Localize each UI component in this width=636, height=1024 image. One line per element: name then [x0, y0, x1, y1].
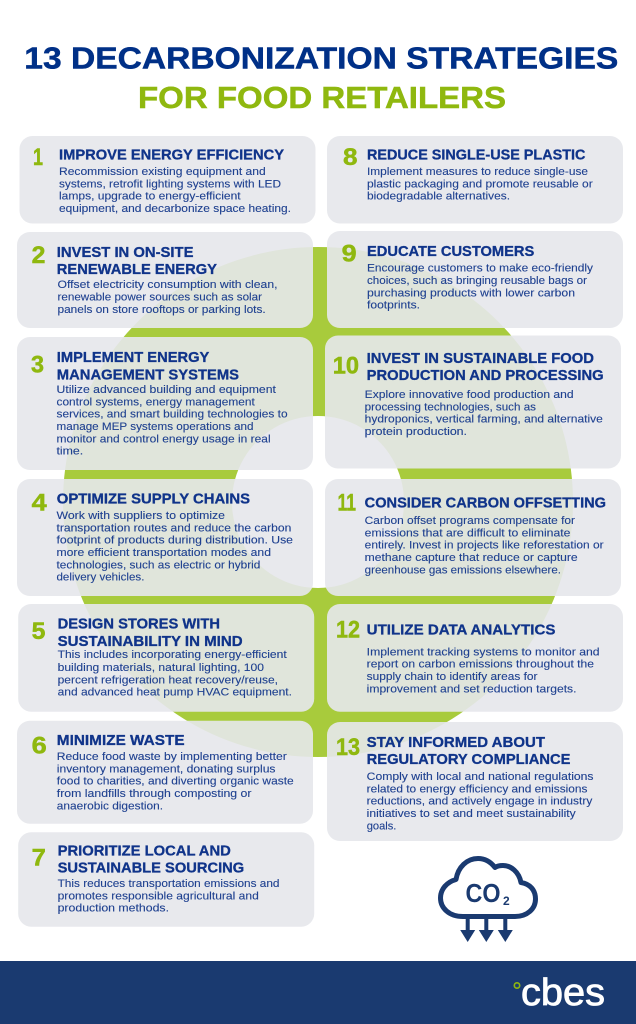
footer bar — [0, 961, 636, 1024]
panel: strategy 9: 9 — [342, 241, 357, 268]
panel: strategy 9: purchasing products with lower carbon — [367, 287, 575, 299]
panel: strategy 6: MINIMIZE WASTE — [57, 733, 185, 749]
panel: strategy 11: 11 — [338, 490, 356, 517]
panel: strategy 11: CONSIDER CARBON OFFSETTING — [365, 496, 606, 512]
panel: strategy 8: biodegradable alternatives. — [367, 191, 510, 203]
panel: strategy 3: services, and smart building technologies to — [56, 409, 288, 421]
panel: strategy 13: STAY INFORMED ABOUT — [367, 735, 545, 751]
icon: CO2 cloud with down arrows: 2 — [503, 894, 510, 908]
panel: strategy 12: report on carbon emissions throughout the — [367, 659, 594, 671]
panel: strategy 8: Implement measures to reduce single-use — [367, 166, 588, 178]
panel: strategy 2 — [17, 232, 313, 328]
panel: strategy 11: Carbon offset programs compensate for — [365, 515, 575, 527]
panel: strategy 4: Work with suppliers to optimize — [56, 510, 225, 522]
panel: strategy 10: INVEST IN SUSTAINABLE FOOD — [367, 351, 594, 367]
panel: strategy 6: inventory management, donating surplus — [57, 763, 276, 775]
logo: cbes: cbes — [521, 972, 605, 1014]
panel: strategy 13: initiatives to set and meet sustainability — [367, 808, 576, 820]
title: 13 DECARBONIZATION STRATEGIES — [24, 40, 618, 76]
panel: strategy 12: UTILIZE DATA ANALYTICS — [367, 623, 556, 639]
panel: strategy 3: monitor and control energy usage in real — [56, 434, 271, 446]
panel: strategy 9: choices, such as bringing reusable bags or — [367, 275, 587, 287]
panel: strategy 5: SUSTAINABILITY IN MIND — [58, 634, 243, 650]
panel: strategy 5: 5 — [32, 618, 45, 645]
panel: strategy 11: methane capture that reduce or capture — [365, 552, 578, 564]
panel: strategy 13: goals. — [367, 820, 396, 832]
panel: strategy 11: emissions that are difficult to eliminate — [365, 527, 570, 539]
panel: strategy 2: 2 — [32, 242, 45, 269]
panel: strategy 7: promotes responsible agricultural and — [58, 890, 259, 902]
panel: strategy 7: 7 — [32, 844, 46, 871]
panel: strategy 9 — [327, 231, 623, 328]
panel: strategy 1: 1 — [33, 144, 43, 171]
panel: strategy 3: MANAGEMENT SYSTEMS — [57, 367, 239, 383]
panel: strategy 1 — [20, 136, 316, 224]
panel: strategy 3: 3 — [31, 351, 44, 378]
panel: strategy 13: REGULATORY COMPLIANCE — [367, 752, 571, 768]
panel: strategy 10: Explore innovative food production and — [365, 389, 574, 401]
panel: strategy 2: panels on store rooftops or parking lots. — [58, 304, 266, 316]
panel: strategy 4: more efficient transportation modes and — [56, 547, 271, 559]
panel: strategy 12: improvement and set reduction targets. — [367, 683, 576, 695]
panel: strategy 4: delivery vehicles. — [56, 572, 144, 584]
panel: strategy 11: entirely. Invest in projects like reforestation or — [365, 540, 604, 552]
panel: strategy 13 — [327, 722, 623, 841]
panel: strategy 2: RENEWABLE ENERGY — [57, 262, 217, 278]
panel: strategy 6 — [17, 721, 313, 824]
panel: strategy 2: renewable power sources such as solar — [58, 292, 262, 304]
panel: strategy 1: IMPROVE ENERGY EFFICIENCY — [59, 148, 284, 164]
panel: strategy 4 — [17, 479, 313, 596]
panel: strategy 3 — [17, 337, 313, 470]
panel: strategy 12: supply chain to identify areas for — [367, 671, 538, 683]
panel: strategy 10: PRODUCTION AND PROCESSING — [367, 368, 604, 384]
title — [24, 40, 618, 115]
panel: strategy 5: percent refrigeration heat recovery/reuse, — [58, 674, 278, 686]
panel: strategy 5: building materials, natural lighting, 100 — [58, 662, 264, 674]
panel: strategy 6: Reduce food waste by implementing better — [57, 751, 287, 763]
panel: strategy 12: Implement tracking systems to monitor and — [367, 646, 600, 658]
panel: strategy 1: systems, retrofit lighting systems with LED — [59, 178, 281, 190]
background ring — [63, 247, 573, 757]
panel: strategy 3: time. — [56, 446, 83, 458]
panel: strategy 4: technologies, such as electric or hybrid — [56, 559, 260, 571]
panel: strategy 9: EDUCATE CUSTOMERS — [367, 244, 535, 260]
panel: strategy 3: control systems, energy management — [56, 396, 256, 408]
panel: strategy 8: REDUCE SINGLE-USE PLASTIC — [367, 148, 586, 164]
panel: strategy 12 — [327, 604, 623, 712]
panel: strategy 8: 8 — [343, 144, 358, 171]
panel: strategy 4: footprint of products during distribution. Use — [56, 535, 293, 547]
panel: strategy 3: IMPLEMENT ENERGY — [57, 350, 210, 366]
panel: strategy 1: lamps, upgrade to energy-efficient — [59, 191, 242, 203]
icon: CO2 cloud with down arrows — [440, 858, 536, 942]
title: FOR FOOD RETAILERS — [138, 80, 506, 115]
panel: strategy 8: plastic packaging and promote reusable or — [367, 178, 593, 190]
panel: strategy 3: Utilize advanced building and equipment — [56, 384, 277, 396]
panel: strategy 6: food to charities, and diverting organic waste — [57, 776, 294, 788]
panel: strategy 13: related to energy efficiency and emissions — [367, 783, 588, 795]
panel: strategy 5: This includes incorporating energy-efficient — [58, 649, 288, 661]
panel: strategy 5 — [18, 604, 314, 712]
panel: strategy 13: reductions, and actively engage in industry — [367, 796, 593, 808]
panel: strategy 9: footprints. — [367, 300, 420, 312]
panel: strategy 6: anaerobic digestion. — [57, 800, 163, 812]
panel: strategy 12: 12 — [336, 617, 360, 644]
panel: strategy 10: protein production. — [365, 426, 467, 438]
panel: strategy 10: 10 — [333, 352, 359, 379]
panel: strategy 7: production methods. — [58, 903, 169, 915]
panel: strategy 9: Encourage customers to make eco-friendly — [367, 263, 593, 275]
panel: strategy 7: SUSTAINABLE SOURCING — [58, 861, 244, 877]
panel: strategy 7: PRIORITIZE LOCAL AND — [58, 844, 231, 860]
panel: strategy 11 — [325, 479, 621, 596]
panel: strategy 6: 6 — [32, 732, 47, 759]
panel: strategy 8 — [327, 136, 623, 224]
panel: strategy 2: Offset electricity consumption with clean, — [58, 279, 278, 291]
panel: strategy 1: Recommission existing equipment and — [59, 166, 266, 178]
panel: strategy 5: and advanced heat pump HVAC equipment. — [58, 687, 292, 699]
panel: strategy 7: This reduces transportation emissions and — [58, 878, 279, 890]
icon: CO2 cloud with down arrows: CO — [466, 878, 500, 908]
panel: strategy 4: transportation routes and reduce the carbon — [56, 522, 291, 534]
panel: strategy 1: equipment, and decarbonize space heating. — [59, 203, 291, 215]
panel: strategy 3: manage MEP systems operations and — [56, 421, 254, 433]
panel: strategy 10: hydroponics, vertical farming, and alternative — [365, 414, 603, 426]
panel: strategy 10 — [325, 336, 621, 468]
panel: strategy 2: INVEST IN ON-SITE — [57, 245, 194, 261]
panel: strategy 13: Comply with local and national regulations — [367, 771, 594, 783]
panel: strategy 5: DESIGN STORES WITH — [58, 617, 220, 633]
panel: strategy 13: 13 — [336, 734, 360, 761]
panel: strategy 4: OPTIMIZE SUPPLY CHAINS — [57, 491, 250, 507]
panel: strategy 4: 4 — [32, 490, 47, 517]
panel: strategy 10: processing technologies, such as — [365, 401, 536, 413]
panel: strategy 11: greenhouse gas emissions elsewhere. — [365, 564, 561, 576]
panel: strategy 7 — [18, 832, 314, 927]
panel: strategy 6: from landfills through composting or — [57, 788, 252, 800]
